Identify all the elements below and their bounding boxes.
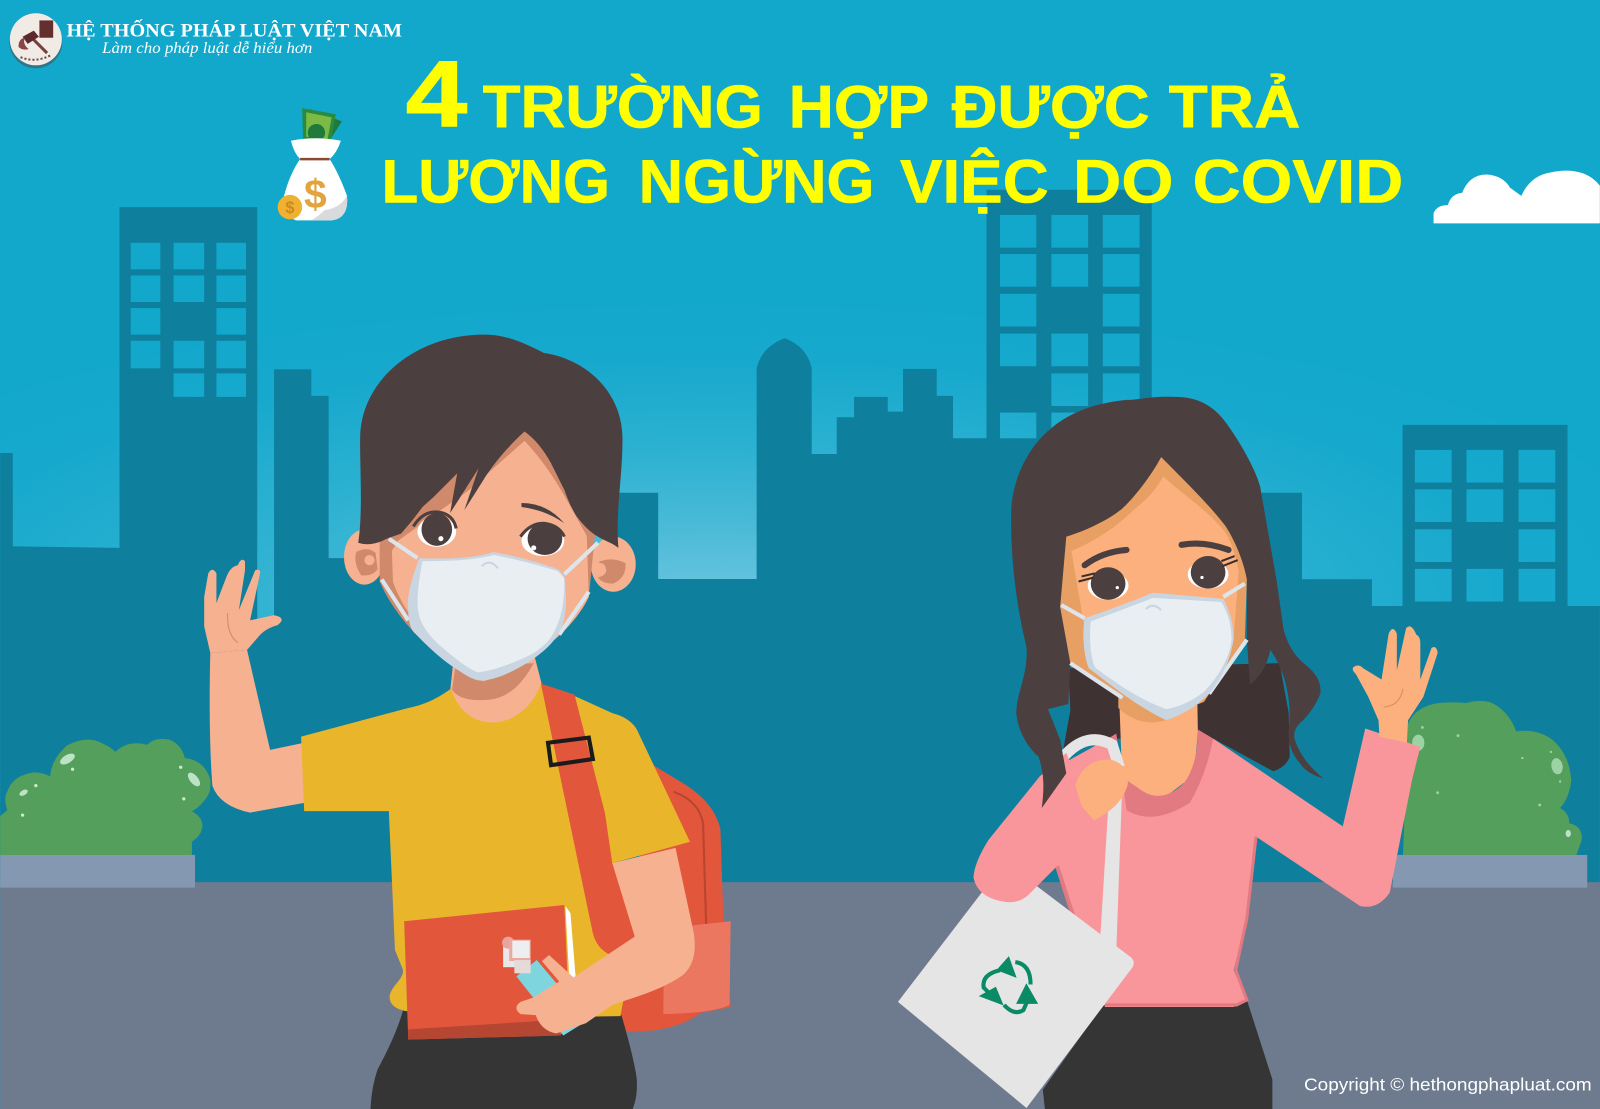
- fist on strap: [1075, 760, 1128, 820]
- yellow t-shirt: [301, 685, 690, 1017]
- site name: HỆ THỐNG PHÁP LUẬT VIỆT NAM: [66, 20, 402, 42]
- eyes and eyebrows: [1079, 544, 1238, 600]
- tote strap: [1063, 740, 1122, 952]
- hair strand over shoulder: [1039, 714, 1066, 808]
- hair back: [1063, 663, 1290, 771]
- t-shirt sleeve: [600, 729, 690, 863]
- face mask: [1061, 584, 1247, 720]
- title line 2: LƯƠNG: [381, 147, 610, 215]
- title line 2: NGỪNG: [639, 147, 874, 215]
- title line 1: HỢP: [789, 73, 929, 140]
- face mask: [382, 539, 598, 681]
- left bush with planter: [0, 739, 211, 888]
- title line 1: ĐƯỢC: [952, 73, 1150, 140]
- icon: money bag: $: [304, 171, 327, 217]
- pants: [1043, 1000, 1272, 1109]
- windows: right building: [1415, 450, 1555, 602]
- site tagline: Làm cho pháp luật dễ hiểu hơn: [101, 40, 313, 57]
- ears: [344, 530, 636, 592]
- long hair: [1011, 397, 1323, 808]
- logo: [9, 13, 62, 68]
- pink sweater: [1040, 728, 1420, 1007]
- title numeral: 4: [406, 41, 467, 146]
- title line 2: COVID: [1193, 147, 1403, 215]
- book: [404, 905, 576, 1040]
- neck shadow: [452, 663, 534, 700]
- city skyline: [0, 190, 1600, 888]
- cloud: [1434, 171, 1600, 223]
- title line 1: TRẢ: [1169, 72, 1300, 140]
- trousers: [370, 1010, 637, 1109]
- right bush with planter: [1393, 701, 1587, 888]
- windows: center building: [1000, 215, 1140, 438]
- collar: [1108, 729, 1213, 817]
- icon: recycle: [983, 960, 1035, 1012]
- hair: [358, 335, 622, 548]
- lower arm and hand: [516, 848, 695, 1034]
- title line 1: [483, 72, 1300, 140]
- copyright: Copyright © hethongphapluat.com: [1304, 1075, 1592, 1095]
- raised hand: [1353, 626, 1438, 743]
- face: [1060, 457, 1247, 720]
- character: woman: [898, 397, 1438, 1109]
- title: [381, 41, 1403, 215]
- neck: [1118, 673, 1198, 801]
- raised arm and hand: [204, 560, 304, 813]
- bag strap with buckle: [541, 684, 637, 955]
- sweater arm: [973, 753, 1093, 902]
- neck: [450, 653, 543, 740]
- face: [380, 408, 596, 682]
- tote bag: [898, 862, 1134, 1108]
- windows: left building: [131, 243, 246, 397]
- road: [0, 882, 1600, 1109]
- sanitizer bottle: [502, 937, 588, 1036]
- title line 2: DO: [1073, 147, 1173, 215]
- title line 2: VIỆC: [900, 147, 1049, 215]
- eyes and eyebrow: [413, 503, 564, 556]
- title line 1: TRƯỜNG: [483, 72, 763, 140]
- icon: money bag: [278, 108, 347, 220]
- title line 2: [381, 147, 1403, 215]
- character: boy: [204, 335, 731, 1109]
- icon: money bag: $: [285, 199, 294, 217]
- backpack: [612, 765, 731, 1032]
